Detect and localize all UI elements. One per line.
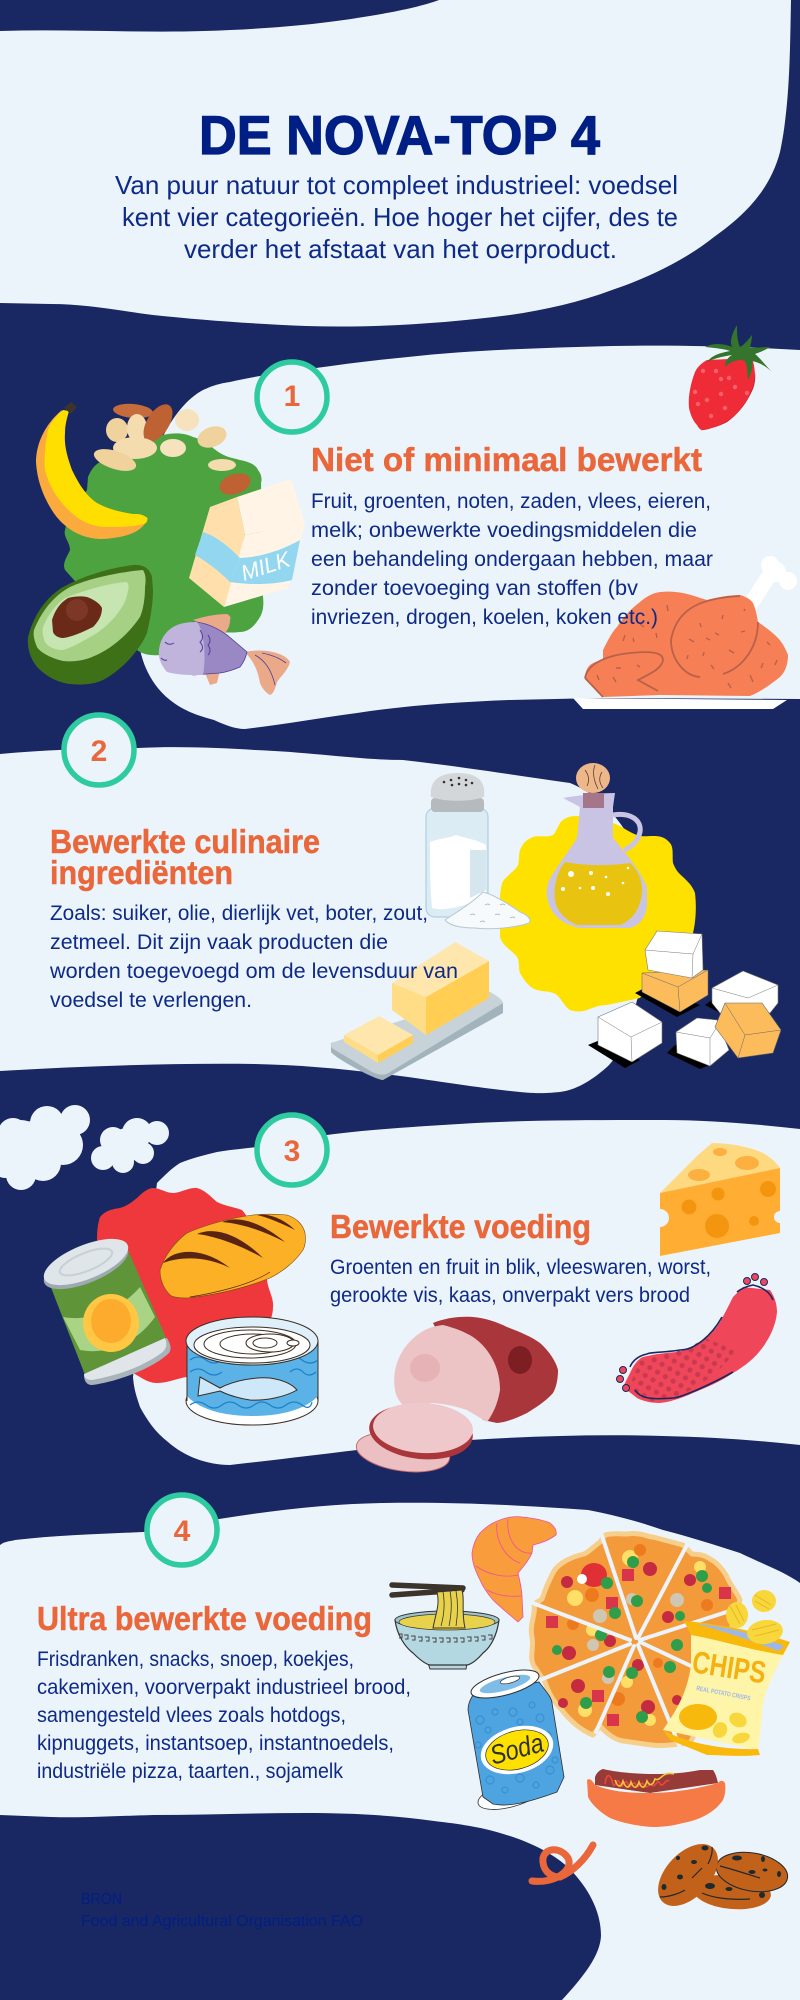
icon: salt shaker	[426, 773, 530, 929]
icon: sugar and fat cubes	[588, 931, 781, 1069]
icon: bread	[160, 1214, 305, 1298]
icon: oil jar	[547, 763, 647, 928]
icon: ham slices	[354, 1400, 476, 1477]
panel: header background	[0, 0, 791, 327]
icon: hot dog	[587, 1769, 725, 1827]
badge: number 2	[64, 715, 134, 785]
icon: ham	[394, 1317, 558, 1423]
panel: section 1 background	[138, 346, 800, 729]
text: section 4: industriële pizza, taarten., sojamelk	[37, 1759, 343, 1783]
intro text: kent vier categorieën. Hoe hoger het cijfer, des te	[122, 202, 678, 232]
intro text: verder het afstaat van het oerproduct.	[184, 234, 617, 264]
title: DE NOVA-TOP 4	[199, 104, 600, 166]
text: section 1	[311, 489, 713, 629]
icon: avocado	[28, 565, 153, 685]
text: section 1: Fruit, groenten, noten, zaden, vlees, eieren,	[311, 489, 711, 513]
icon: pizza	[530, 1530, 745, 1752]
heading: section 1: Niet of minimaal bewerkt	[311, 441, 702, 478]
icon: fish	[159, 614, 290, 695]
text: section 4: Frisdranken, snacks, snoep, koekjes,	[37, 1647, 354, 1671]
icon: milk carton: MILK	[238, 546, 294, 586]
text: section 2: voedsel te verlengen.	[50, 988, 252, 1012]
icon: butter	[331, 942, 503, 1080]
icon: green blob	[64, 433, 263, 655]
text: section 2: worden toegevoegd om de levensduur van	[49, 959, 458, 983]
icon: strawberry	[689, 325, 772, 430]
heading: section 2	[50, 823, 320, 891]
panel: section 4 background	[0, 1503, 800, 2000]
badge: number 3	[257, 1115, 327, 1185]
icon: banana	[36, 402, 148, 539]
text: section 3: Groenten en fruit in blik, vleeswaren, worst,	[330, 1255, 711, 1279]
text: section 2: zetmeel. Dit zijn vaak producten die	[50, 930, 388, 954]
badge: number 3: 3	[284, 1135, 300, 1168]
text: section 2	[49, 901, 458, 1012]
text: section 1: zonder toevoeging van stoffen (bv	[311, 576, 638, 600]
intro text	[115, 170, 678, 264]
text: section 4: samengesteld vlees zoals hotdogs,	[37, 1703, 346, 1727]
icon: yellow blob	[500, 816, 696, 1012]
icon: ribbon	[532, 1845, 593, 1881]
badge: number 1	[257, 362, 327, 432]
text: section 1: invriezen, drogen, koelen, koken etc.)	[311, 605, 658, 629]
icon: nuts	[91, 399, 253, 498]
text: section 3	[330, 1255, 711, 1307]
panel: section 3 background	[133, 1120, 800, 1465]
text: section 1: melk; onbewerkte voedingsmiddelen die	[311, 518, 697, 542]
icon: clouds	[0, 1105, 169, 1190]
intro text: Van puur natuur tot compleet industrieel: voedsel	[115, 170, 678, 200]
icon: green can	[38, 1229, 171, 1385]
icon: milk carton	[189, 479, 305, 607]
icon: red blob	[97, 1188, 273, 1383]
source credit: Food and Agricultural Organisation FAO	[81, 1913, 363, 1930]
text: section 4	[37, 1647, 411, 1783]
icon: cheese	[651, 1143, 786, 1256]
heading: section 4: Ultra bewerkte voeding	[37, 1600, 372, 1637]
icon: cookies	[647, 1833, 791, 1917]
icon: tuna can	[186, 1317, 318, 1425]
heading: section 3: Bewerkte voeding	[330, 1208, 591, 1245]
icon: chips bag	[663, 1590, 790, 1756]
badge: number 4	[147, 1495, 217, 1565]
panel: section 2 background	[0, 747, 651, 1093]
icon: sausage	[616, 1274, 777, 1403]
badge: number 4: 4	[174, 1515, 191, 1548]
badge: number 2: 2	[91, 735, 107, 768]
text: section 4: cakemixen, voorverpakt industrieel brood,	[37, 1675, 411, 1699]
text: section 4: kipnuggets, instantsoep, instantnoedels,	[37, 1731, 394, 1755]
icon: noodle bowl	[392, 1585, 499, 1669]
icon: soda can: Soda	[487, 1728, 547, 1771]
source credit: BRON	[81, 1891, 122, 1908]
source credit	[81, 1891, 363, 1930]
text: section 3: gerookte vis, kaas, onverpakt vers brood	[330, 1283, 690, 1307]
badge: number 1: 1	[284, 380, 300, 413]
icon: croissant	[472, 1517, 556, 1622]
text: section 2: Zoals: suiker, olie, dierlijk vet, boter, zout,	[50, 901, 428, 925]
text: section 1: een behandeling ondergaan hebben, maar	[311, 547, 713, 571]
icon: chips bag: CHIPS	[690, 1644, 768, 1690]
icon: roast chicken	[573, 556, 797, 709]
heading: section 2: ingrediënten	[50, 854, 233, 891]
icon: chips bag: REAL POTATO CRISPS	[696, 1685, 751, 1703]
icon: soda can	[468, 1664, 564, 1815]
heading: section 2: Bewerkte culinaire	[50, 823, 320, 860]
